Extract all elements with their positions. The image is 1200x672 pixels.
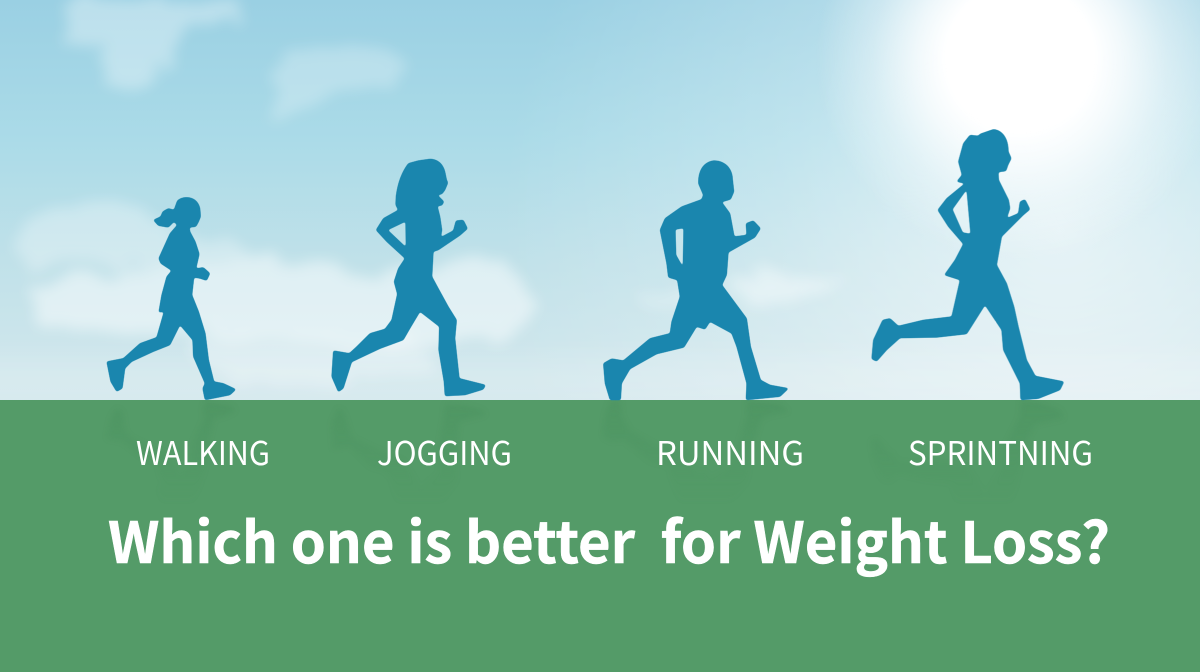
- label: running: RUNNING: [656, 427, 804, 475]
- label: sprintning: SPRINTNING: [908, 427, 1093, 475]
- runner reflections on ground: [107, 400, 1064, 671]
- sky background: [0, 0, 1200, 401]
- silhouette: jogging woman: [332, 159, 486, 396]
- ground: [0, 400, 1200, 672]
- horizon haze: [0, 355, 1200, 403]
- label: jogging: JOGGING: [377, 427, 512, 475]
- sun glow: [815, 0, 1200, 263]
- clouds: [22, 0, 852, 385]
- label: walking: WALKING: [136, 427, 270, 475]
- silhouette: sprinting woman: [872, 129, 1064, 400]
- silhouette: running man: [603, 161, 789, 400]
- silhouette: walking woman: [107, 197, 236, 400]
- title: Which one is better for Weight Loss?: [108, 498, 1110, 580]
